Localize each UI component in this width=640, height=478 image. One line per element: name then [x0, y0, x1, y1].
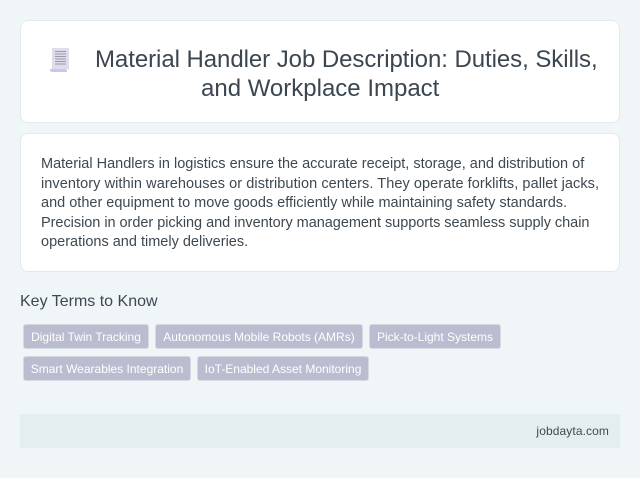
- title: [95, 46, 598, 102]
- tag: IoT-Enabled Asset Monitoring: [205, 362, 361, 376]
- tag: [23, 324, 149, 349]
- icon: document scroll: [50, 48, 69, 72]
- title: Material Handler Job Description: Duties, Skills,: [95, 46, 598, 73]
- tag: [197, 356, 369, 381]
- footer bar: [20, 414, 620, 448]
- title: and Workplace Impact: [201, 75, 439, 102]
- intro paragraph: Material Handlers in logistics ensure the accurate receipt, storage, and distribution of: [41, 156, 584, 172]
- tags: [23, 324, 501, 381]
- tag: Digital Twin Tracking: [31, 330, 141, 344]
- tag: [155, 324, 363, 349]
- intro paragraph: Precision in order picking and inventory management supports seamless supply chain: [41, 215, 589, 231]
- intro paragraph: operations and timely deliveries.: [41, 234, 248, 250]
- tag: [369, 324, 501, 349]
- intro paragraph: inventory within warehouses or distribution centers. They operate forklifts, pallet jacks,: [41, 176, 599, 192]
- footer source: jobdayta.com: [536, 424, 609, 438]
- section heading: key terms: Key Terms to Know: [20, 293, 158, 310]
- header panel: [20, 20, 620, 123]
- tag: Pick-to-Light Systems: [377, 330, 493, 344]
- intro paragraph: [41, 156, 599, 250]
- intro text panel: [20, 133, 620, 272]
- tag: [23, 356, 191, 381]
- tag: Autonomous Mobile Robots (AMRs): [163, 330, 355, 344]
- intro paragraph: and other equipment to move goods efficiently while maintaining safety standards.: [41, 195, 567, 211]
- tag: Smart Wearables Integration: [31, 362, 183, 376]
